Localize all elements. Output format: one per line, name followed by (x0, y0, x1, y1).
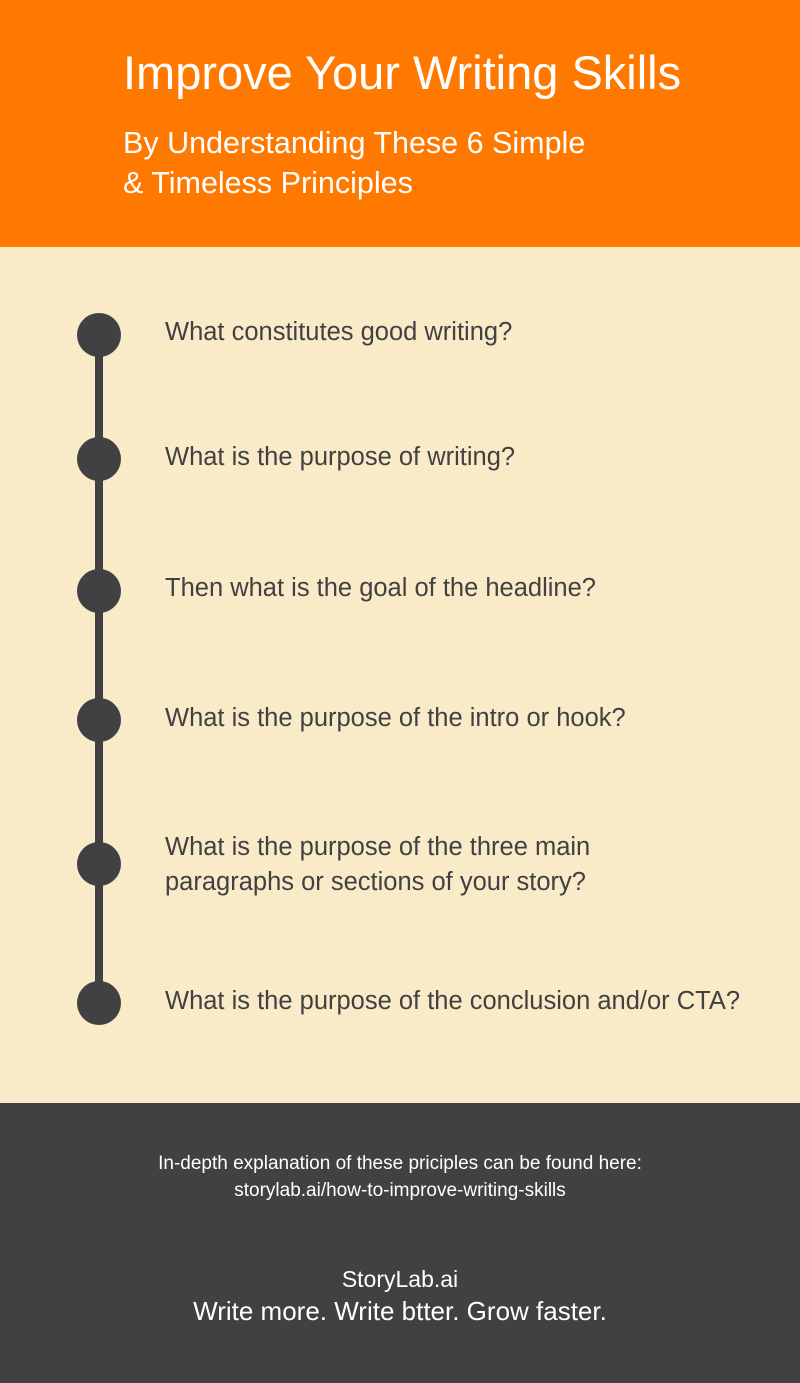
brand (193, 1266, 607, 1326)
question 3: Then what is the goal of the headline? (165, 574, 596, 602)
footer (0, 1103, 800, 1383)
dot 6 (77, 981, 121, 1025)
footer note: storylab.ai/how-to-improve-writing-skills (234, 1180, 566, 1201)
footer note (158, 1153, 642, 1201)
dot 2 (77, 437, 121, 481)
header (0, 0, 800, 247)
brand: Write more. Write btter. Grow faster. (193, 1296, 607, 1326)
title: Improve Your Writing Skills (123, 46, 681, 99)
question 4: What is the purpose of the intro or hook? (165, 704, 626, 732)
dot 1 (77, 313, 121, 357)
timeline line (95, 335, 103, 1003)
subtitle: By Understanding These 6 Simple (123, 126, 585, 160)
footer note: In-depth explanation of these priciples can be found here: (158, 1153, 642, 1174)
panel: timeline (0, 247, 800, 1103)
question 5: paragraphs or sections of your story? (165, 868, 586, 896)
question 6: What is the purpose of the conclusion and/or CTA? (165, 987, 740, 1015)
question 1: What constitutes good writing? (165, 318, 512, 346)
subtitle (123, 126, 585, 200)
subtitle: & Timeless Principles (123, 166, 413, 200)
dot 4 (77, 698, 121, 742)
question 5: What is the purpose of the three main (165, 833, 590, 861)
dot 3 (77, 569, 121, 613)
question 5 (165, 833, 590, 896)
dot 5 (77, 842, 121, 886)
question 2: What is the purpose of writing? (165, 443, 515, 471)
brand: StoryLab.ai (342, 1266, 458, 1292)
